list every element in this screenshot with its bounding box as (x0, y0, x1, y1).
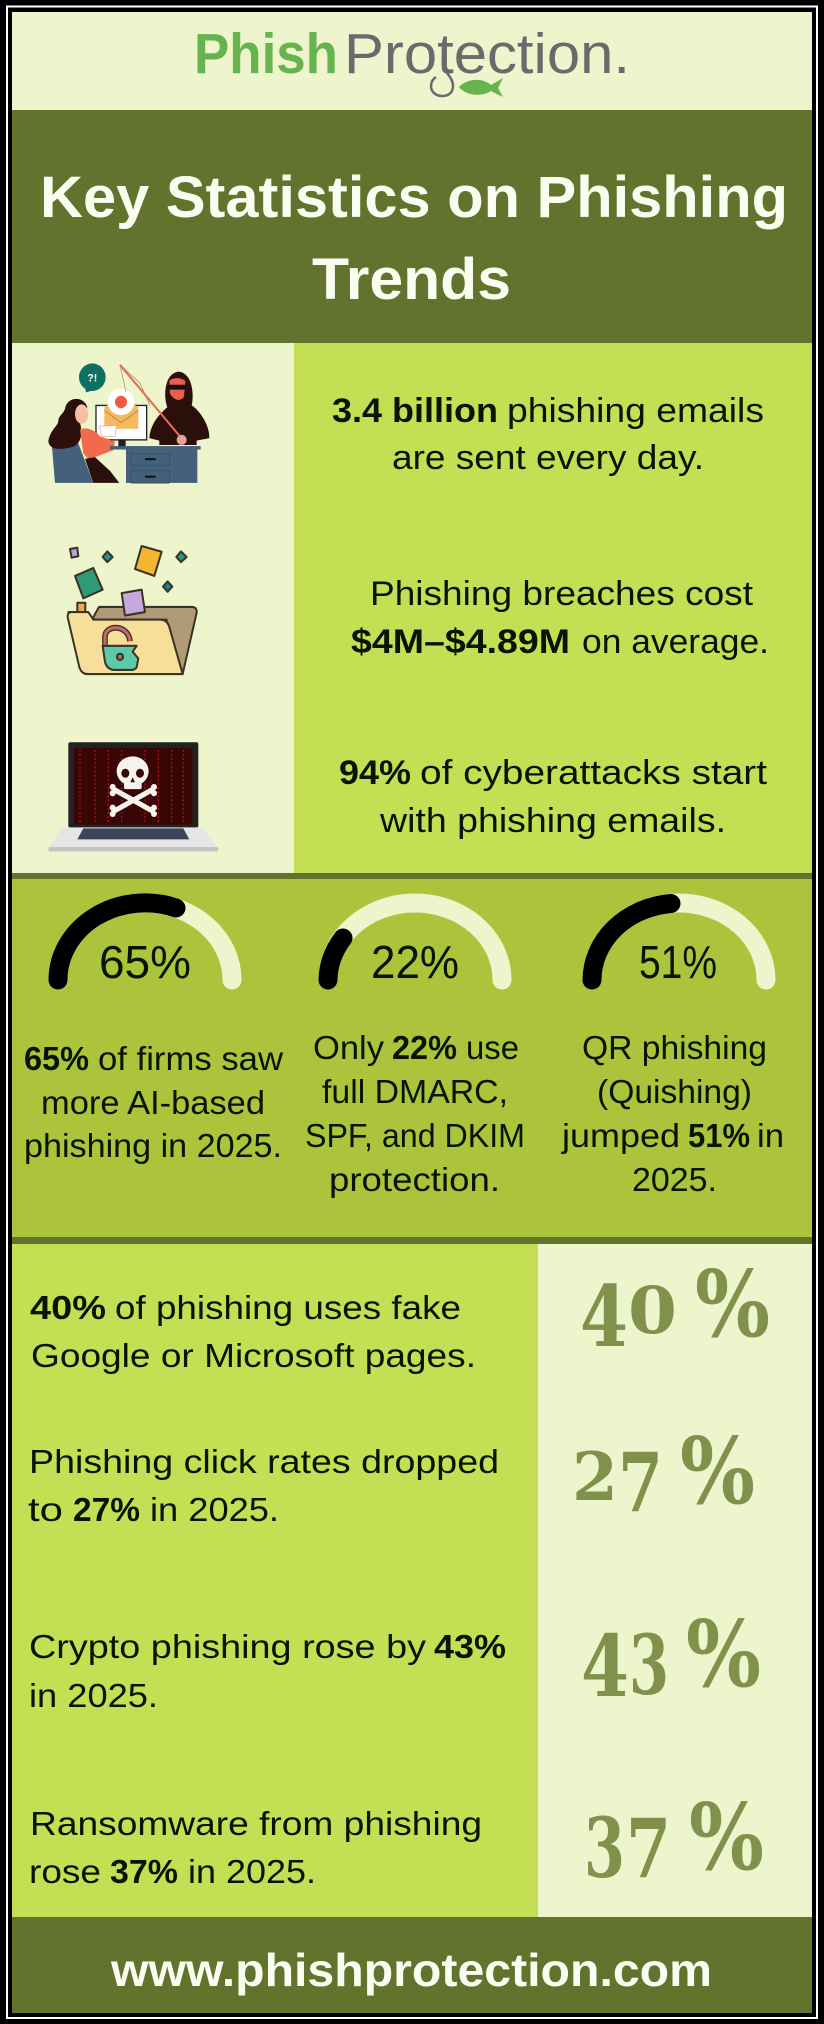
logo panel (12, 12, 812, 110)
logo: PhishProtection: Phish (194, 22, 338, 86)
big number: 37 percent (584, 1783, 764, 1897)
big number: 27 percent: 7 (618, 1436, 663, 1531)
big number: 37 percent: 7 (626, 1802, 671, 1897)
text: 3.4 billion phishing emails: 3.4 billion (332, 392, 498, 430)
text: ransomware: rose (29, 1853, 101, 1890)
text: AI-based phishing: phishing in 2025. (24, 1127, 282, 1164)
text: crypto phishing: in 2025. (29, 1677, 158, 1714)
gauge: 65 percent (58, 903, 232, 988)
text: breach cost: on average. (582, 623, 769, 661)
footer band (12, 1917, 812, 2013)
big number: 40 percent: 0 (628, 1273, 677, 1349)
text: DMARC, SPF and DKIM (305, 1029, 525, 1198)
text: AI-based phishing (24, 1040, 283, 1164)
panel: gauges (12, 873, 812, 1244)
text: 3.4 billion phishing emails: are sent every day. (392, 439, 704, 477)
big number: 27 percent: % (680, 1417, 755, 1525)
big number: 40 percent: % (695, 1250, 770, 1358)
text: fake Google or Microsoft pages: Google or Microsoft pages. (31, 1337, 476, 1374)
text: 94 percent of cyberattacks (339, 754, 768, 840)
text: click rates: Phishing click rates dropped (29, 1443, 499, 1480)
heading (40, 165, 788, 312)
big number: 37 percent: % (689, 1783, 764, 1891)
text: 3.4 billion phishing emails: phishing emails (507, 392, 764, 430)
text: QR phishing (561, 1029, 784, 1198)
text: ransomware: 37% (110, 1853, 178, 1890)
logo: PhishProtection: Protection. (344, 22, 630, 86)
text: QR phishing: 2025. (632, 1161, 717, 1198)
title band (12, 110, 812, 343)
text: DMARC, SPF and DKIM: Only (313, 1029, 385, 1066)
text: DMARC, SPF and DKIM: use (466, 1029, 519, 1066)
text: click rates: to (28, 1491, 63, 1528)
logo: PhishProtection (194, 22, 630, 97)
big number: 43 percent: 3 (629, 1618, 669, 1714)
icon: folder with broken lock and flying papers (68, 546, 197, 674)
text: 3.4 billion phishing emails (332, 392, 764, 477)
big number: 43 percent: % (686, 1600, 761, 1708)
text: ransomware (29, 1805, 482, 1890)
heading: Trends (312, 247, 511, 312)
big number: 40 percent (580, 1250, 770, 1366)
text: AI-based phishing: 65% (24, 1040, 89, 1077)
text: click rates (28, 1443, 499, 1528)
text: breach cost: Phishing breaches cost (370, 575, 754, 613)
text: fake Google or Microsoft pages: of phishing uses fake (115, 1289, 461, 1326)
text: QR phishing: 51% (688, 1117, 750, 1154)
big number: 37 percent: 3 (584, 1801, 625, 1897)
text: breach cost (351, 575, 769, 661)
big number: 27 percent (572, 1417, 755, 1531)
text: DMARC, SPF and DKIM: full DMARC, (322, 1073, 508, 1110)
heading: Key Statistics on Phishing (40, 165, 788, 230)
text: QR phishing: in (757, 1117, 784, 1154)
gauge: 22 percent: 22% (371, 936, 459, 988)
gauge: 51 percent: 51% (639, 936, 717, 988)
big number: 43 percent: 4 (581, 1617, 629, 1717)
icon: laptop with skull and crossbones (48, 742, 218, 851)
text: QR phishing: jumped (561, 1117, 680, 1154)
text: ransomware: Ransomware from phishing (30, 1805, 482, 1842)
text: fake Google or Microsoft pages: 40% (30, 1289, 106, 1326)
text: crypto phishing: Crypto phishing rose by (29, 1628, 427, 1665)
text: QR phishing: (Quishing) (597, 1073, 752, 1110)
text: click rates: in 2025. (150, 1491, 279, 1528)
text: breach cost: $4M–$4.89M (351, 623, 570, 661)
text: 94 percent of cyberattacks: with phishing emails. (379, 802, 726, 840)
text: DMARC, SPF and DKIM: 22% (392, 1029, 457, 1066)
icon: hacker phishing an office worker (48, 363, 209, 483)
text: crypto phishing: 43% (434, 1628, 506, 1665)
text: fake Google or Microsoft pages (30, 1289, 476, 1374)
gauge: 22 percent (328, 903, 502, 988)
text: DMARC, SPF and DKIM: SPF, and DKIM (305, 1117, 525, 1154)
text: click rates: 27% (73, 1491, 140, 1528)
panel: bottom statistics (12, 1244, 812, 1917)
panel: top statistics (12, 343, 812, 873)
footer url: www.phishprotection.com (110, 1944, 712, 1996)
text: AI-based phishing: of firms saw (98, 1040, 283, 1077)
text: QR phishing: QR phishing (582, 1029, 767, 1066)
big number: 27 percent: 2 (572, 1438, 618, 1516)
gauge: 65 percent: 65% (99, 936, 191, 988)
big number: 43 percent (581, 1600, 761, 1717)
text: ransomware: in 2025. (188, 1853, 316, 1890)
text: DMARC, SPF and DKIM: protection. (329, 1161, 500, 1198)
text: 94 percent of cyberattacks: 94% (339, 754, 411, 792)
text: crypto phishing (29, 1628, 506, 1714)
big number: 40 percent: 4 (580, 1267, 628, 1366)
gauge: 51 percent (592, 903, 766, 988)
text: AI-based phishing: more AI-based (41, 1084, 265, 1121)
text: 94 percent of cyberattacks: of cyberattacks start (420, 754, 768, 792)
icon: hacker phishing an office worker: ?! (87, 372, 97, 384)
